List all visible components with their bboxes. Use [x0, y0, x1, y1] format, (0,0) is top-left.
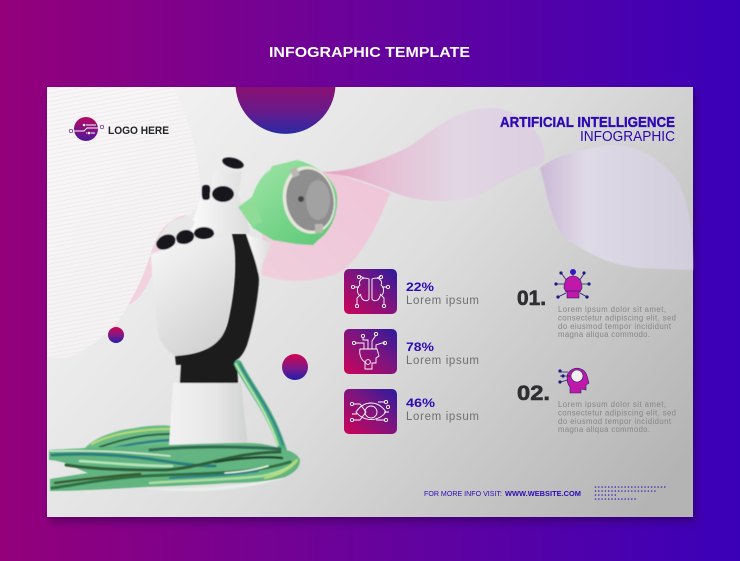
- plug body: [238, 160, 337, 245]
- footer label: FOR MORE INFO VISIT:: [424, 489, 502, 498]
- decorative circle: small left: [108, 327, 124, 343]
- thumb: [244, 234, 272, 273]
- logo: [69, 117, 169, 141]
- item 01: [517, 269, 676, 339]
- plug socket: [281, 165, 339, 235]
- heading: artificial intelligence: ARTIFICIAL INTELLIGENCE: [500, 114, 675, 131]
- stat: 46%: [344, 389, 479, 434]
- footer website: WWW.WEBSITE.COM: [505, 489, 581, 498]
- cable: front coil: [49, 443, 300, 491]
- paragraph 02: do eiusmod tempor incididunt: [558, 417, 672, 426]
- paragraph 01: Lorem ipsum dolor sit amet,: [558, 305, 666, 314]
- stat value: 78%: [406, 340, 434, 354]
- paragraph 01: magna aliqua commodo.: [558, 330, 650, 339]
- stat label: Lorem ipsum: [406, 355, 479, 367]
- plug socket highlight: [306, 180, 330, 220]
- fingers: [190, 169, 250, 233]
- stat icon: head with circuits: [344, 329, 397, 374]
- paragraph 01: do eiusmod tempor incididunt: [558, 322, 672, 331]
- main title: INFOGRAPHIC TEMPLATE: [269, 44, 470, 61]
- title block: [500, 114, 675, 145]
- decorative circle: top: [236, 87, 335, 134]
- dot pattern: [596, 487, 668, 499]
- line mesh: left wave: [47, 87, 186, 348]
- panel shadow: [50, 92, 696, 522]
- paragraph 01: [558, 305, 676, 339]
- logo text: LOGO HERE: [108, 125, 169, 137]
- line mesh: pink wave: [262, 108, 544, 281]
- stat: 78%: [344, 329, 479, 374]
- stat icon: brain: [344, 269, 397, 314]
- number 02: 02.: [517, 382, 550, 405]
- illustration: robot hand with plug and cable: [49, 155, 341, 491]
- stat icon: eye with circuits: [344, 389, 397, 434]
- icon: robot with nodes: [554, 269, 591, 299]
- left finger: [156, 215, 195, 245]
- paragraph 02: Lorem ipsum dolor sit amet,: [558, 400, 666, 409]
- logo icon: [69, 117, 104, 141]
- wrist collar: [175, 354, 238, 383]
- stat value: 22%: [406, 280, 434, 294]
- decorative circle: right of hand: [282, 354, 308, 380]
- stat: 22%: [344, 269, 479, 314]
- paragraph 02: [558, 400, 676, 434]
- palm: [151, 237, 234, 356]
- paragraph 01: consectetur adipiscing elit, sed: [558, 314, 676, 322]
- knuckles: [154, 155, 245, 253]
- wrist base: [169, 383, 248, 446]
- plug: [238, 160, 341, 245]
- plug body shade: [240, 200, 262, 226]
- cable: back coil: [85, 425, 171, 452]
- stat value: 46%: [406, 396, 435, 410]
- stat label: Lorem ipsum: [406, 295, 479, 307]
- plug face: [277, 162, 341, 238]
- item 02: [517, 368, 676, 434]
- line mesh: lavender wave: [540, 145, 693, 270]
- stat label: Lorem ipsum: [406, 411, 479, 423]
- icon: head with nodes: [558, 368, 589, 393]
- paragraph 02: consectetur adipiscing elit, sed: [558, 408, 676, 418]
- number 01: 01.: [517, 287, 546, 310]
- subheading: infographic: INFOGRAPHIC: [580, 128, 675, 145]
- cable: rising from wrist: [236, 364, 283, 464]
- footer: [424, 487, 668, 499]
- paragraph 02: magna aliqua commodo.: [558, 425, 650, 434]
- panel: main card: [47, 87, 693, 517]
- black palm strip: [175, 234, 259, 365]
